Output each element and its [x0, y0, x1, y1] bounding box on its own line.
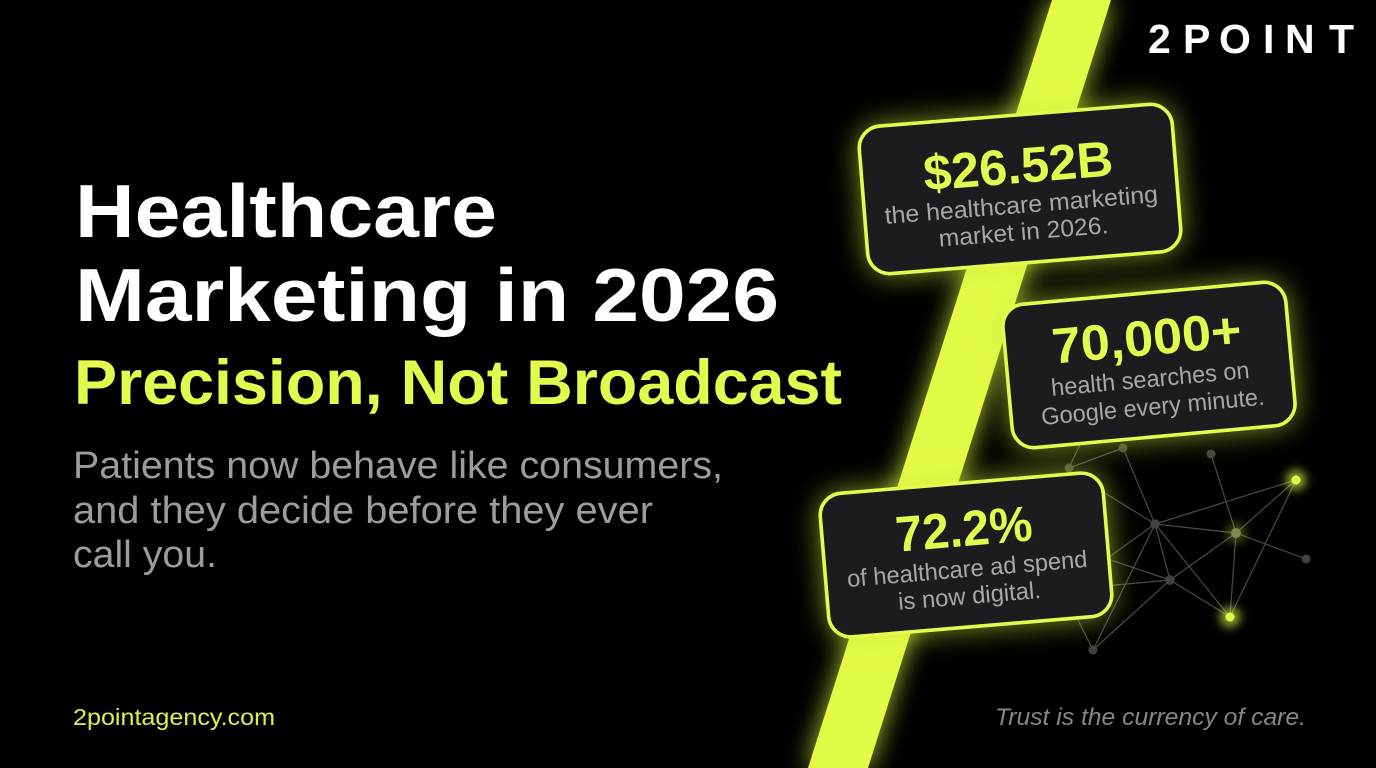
caption [1038, 356, 1266, 431]
card: digital ad spend [818, 471, 1114, 639]
description: call you. [73, 534, 217, 576]
caption: of healthcare ad spend [846, 546, 1088, 593]
stat: $26.52B: $26.52B [921, 131, 1115, 202]
caption [884, 181, 1161, 257]
description: Patients now behave like consumers, [73, 445, 723, 487]
title: Healthcare [75, 169, 497, 253]
caption: the healthcare marketing [884, 181, 1159, 230]
footer: tagline: Trust is the currency of care. [995, 704, 1306, 731]
card: health searches [1001, 280, 1297, 450]
caption: Google every minute. [1040, 384, 1266, 431]
description [73, 445, 723, 576]
card: market size [858, 103, 1182, 275]
footer: website: 2pointagency.com [73, 704, 275, 730]
caption: market in 2026. [938, 212, 1109, 253]
stat: 70,000+: 70,000+ [1049, 302, 1244, 375]
title [75, 169, 779, 337]
subtitle: Precision, Not Broadcast [74, 348, 842, 418]
title: Marketing in 2026 [75, 253, 779, 337]
description: and they decide before they ever [73, 490, 653, 532]
diagonal neon stripe [808, 0, 1111, 768]
caption [846, 546, 1091, 620]
network graph [1064, 440, 1310, 654]
caption: is now digital. [897, 577, 1042, 616]
caption: health searches on [1050, 357, 1251, 402]
logo: 2POINT [1148, 16, 1354, 62]
stat: 72.2%: 72.2% [893, 495, 1034, 563]
